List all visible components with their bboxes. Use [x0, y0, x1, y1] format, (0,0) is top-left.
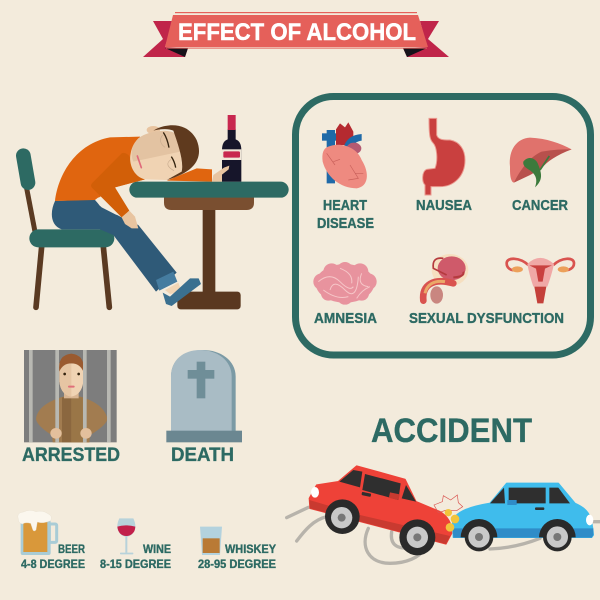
chair — [23, 156, 114, 307]
label: heart disease: HEART — [323, 198, 367, 214]
skid marks — [287, 507, 600, 563]
title banner — [143, 12, 449, 57]
icon: liver — [510, 138, 572, 187]
icon: female reproductive system — [507, 258, 574, 303]
label: whiskey: 28-95 DEGREE — [198, 557, 276, 571]
wine bottle — [212, 115, 241, 182]
beer icon — [18, 510, 57, 555]
man — [52, 125, 212, 306]
title banner: EFFECT OF ALCOHOL — [178, 19, 416, 46]
icon: male reproductive system — [423, 254, 468, 304]
label: wine — [100, 542, 171, 571]
label: amnesia: AMNESIA — [314, 311, 377, 327]
label: death: DEATH — [171, 444, 234, 466]
car crash illustration — [287, 466, 600, 563]
label: arrested: ARRESTED — [22, 444, 120, 466]
label: beer — [21, 542, 85, 571]
label: whiskey — [198, 542, 276, 571]
drunk man at table illustration — [23, 115, 289, 309]
arrested man behind bars — [24, 350, 117, 442]
red car — [309, 466, 452, 555]
panel: health effects — [296, 96, 590, 355]
label: cancer: CANCER — [512, 198, 568, 214]
wine glass icon — [117, 518, 135, 554]
label: beer: BEER — [58, 542, 85, 556]
label: wine: WINE — [143, 542, 171, 556]
gravestone — [166, 350, 242, 442]
label: whiskey: WHISKEY — [225, 542, 276, 556]
collision spark — [434, 495, 463, 532]
icon: heart — [322, 122, 367, 188]
whiskey glass icon — [200, 527, 222, 555]
label: nausea: NAUSEA — [416, 198, 472, 214]
label: beer: 4-8 DEGREE — [21, 557, 85, 571]
label: sexual dysfunction: SEXUAL DYSFUNCTION — [409, 311, 564, 327]
label: heart disease: DISEASE — [317, 216, 374, 232]
table — [129, 182, 289, 309]
label: wine: 8-15 DEGREE — [100, 557, 171, 571]
heading: accident: ACCIDENT — [371, 412, 532, 450]
blue car — [453, 483, 593, 551]
icon: stomach — [423, 118, 465, 195]
icon: brain — [313, 262, 377, 305]
label: heart disease — [317, 198, 374, 232]
